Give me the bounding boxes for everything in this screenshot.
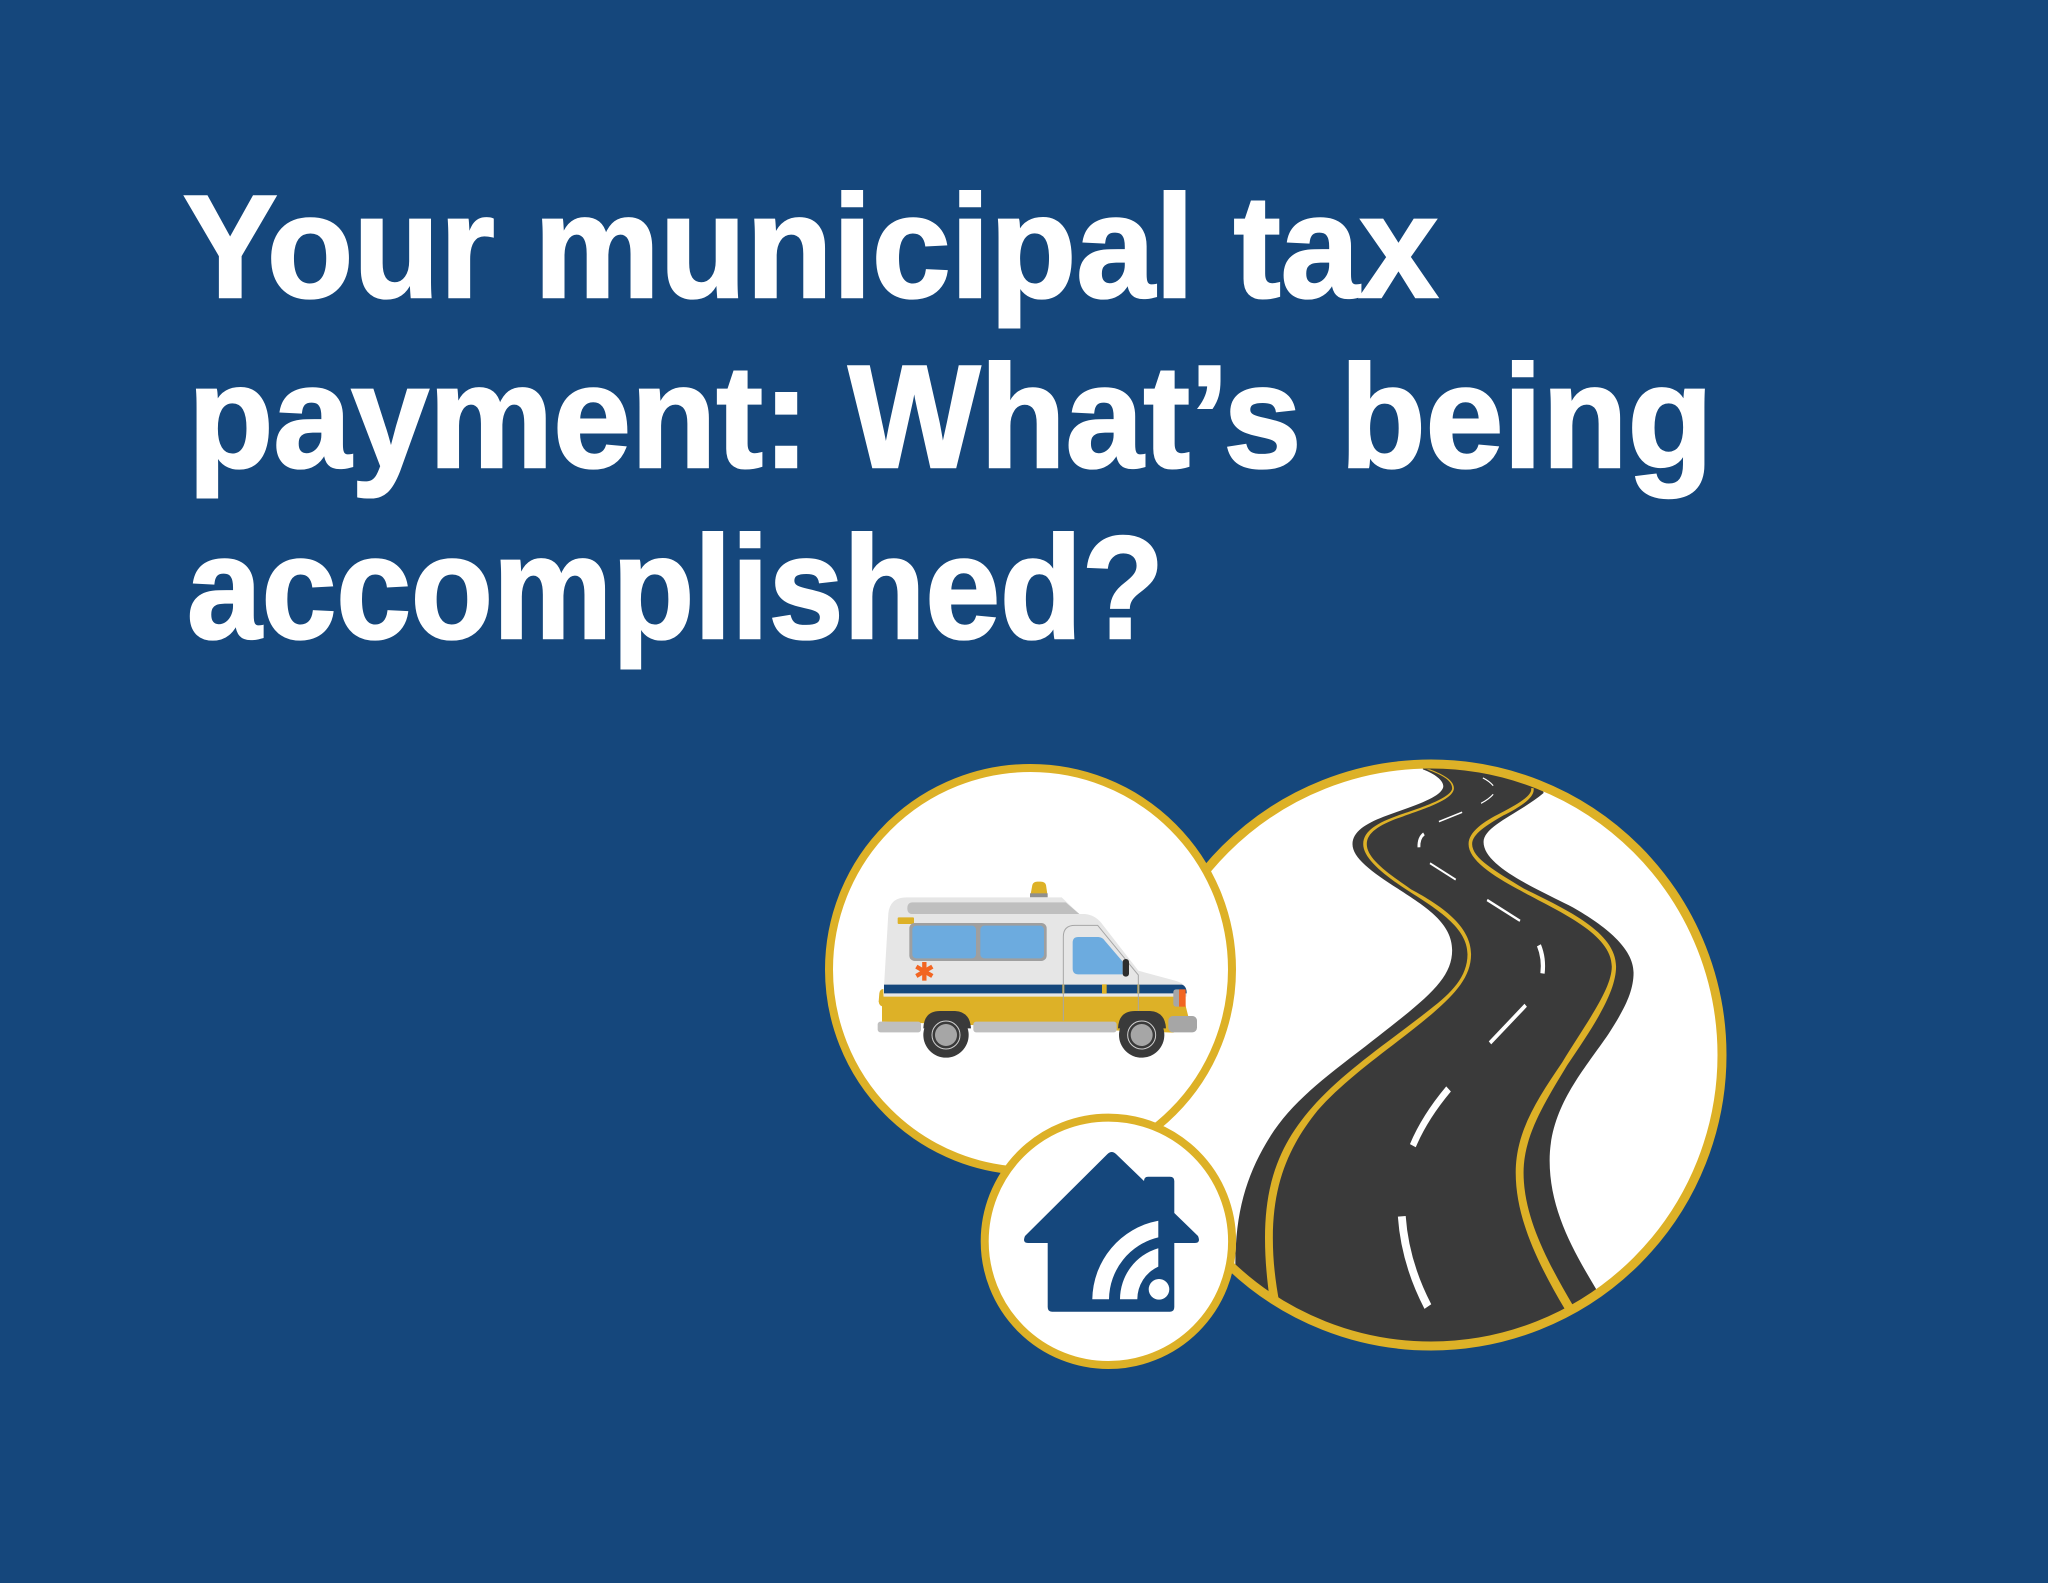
front wheel [1118, 1011, 1166, 1058]
right road edge line [1469, 788, 1616, 1309]
door accents [1062, 984, 1139, 994]
title [183, 165, 1713, 669]
cab door outline [1063, 925, 1138, 1021]
centre line dashes [1402, 778, 1543, 1307]
panel: ambulance circle [829, 768, 1232, 1171]
icon: house with wifi [1024, 1152, 1199, 1312]
roof stripe [907, 902, 1079, 914]
title: accomplished? [187, 506, 1164, 669]
body [884, 897, 1187, 997]
medical star [916, 962, 932, 981]
rear marker [898, 917, 914, 924]
mirror [1123, 959, 1129, 977]
road surface [1235, 756, 1634, 1360]
tail lamp [1173, 989, 1186, 1007]
rear wheel [923, 1011, 971, 1058]
cab window [1073, 937, 1123, 974]
side window [909, 923, 1047, 961]
road circle ring [1140, 764, 1722, 1346]
house [1024, 1152, 1199, 1312]
title: Your municipal tax [183, 165, 1438, 328]
panel: smart home circle [985, 1118, 1232, 1365]
side skirt [878, 1016, 1197, 1032]
navy stripe [884, 985, 1187, 993]
roof beacon [1031, 882, 1047, 894]
wifi arcs [1092, 1221, 1169, 1300]
panel: road circle [1140, 756, 1722, 1360]
icon: winding road [1235, 756, 1634, 1360]
gold lower body [882, 997, 1188, 1033]
icon: ambulance [878, 882, 1197, 1058]
left road edge line [1265, 769, 1471, 1302]
title: payment: What’s being [188, 335, 1713, 498]
